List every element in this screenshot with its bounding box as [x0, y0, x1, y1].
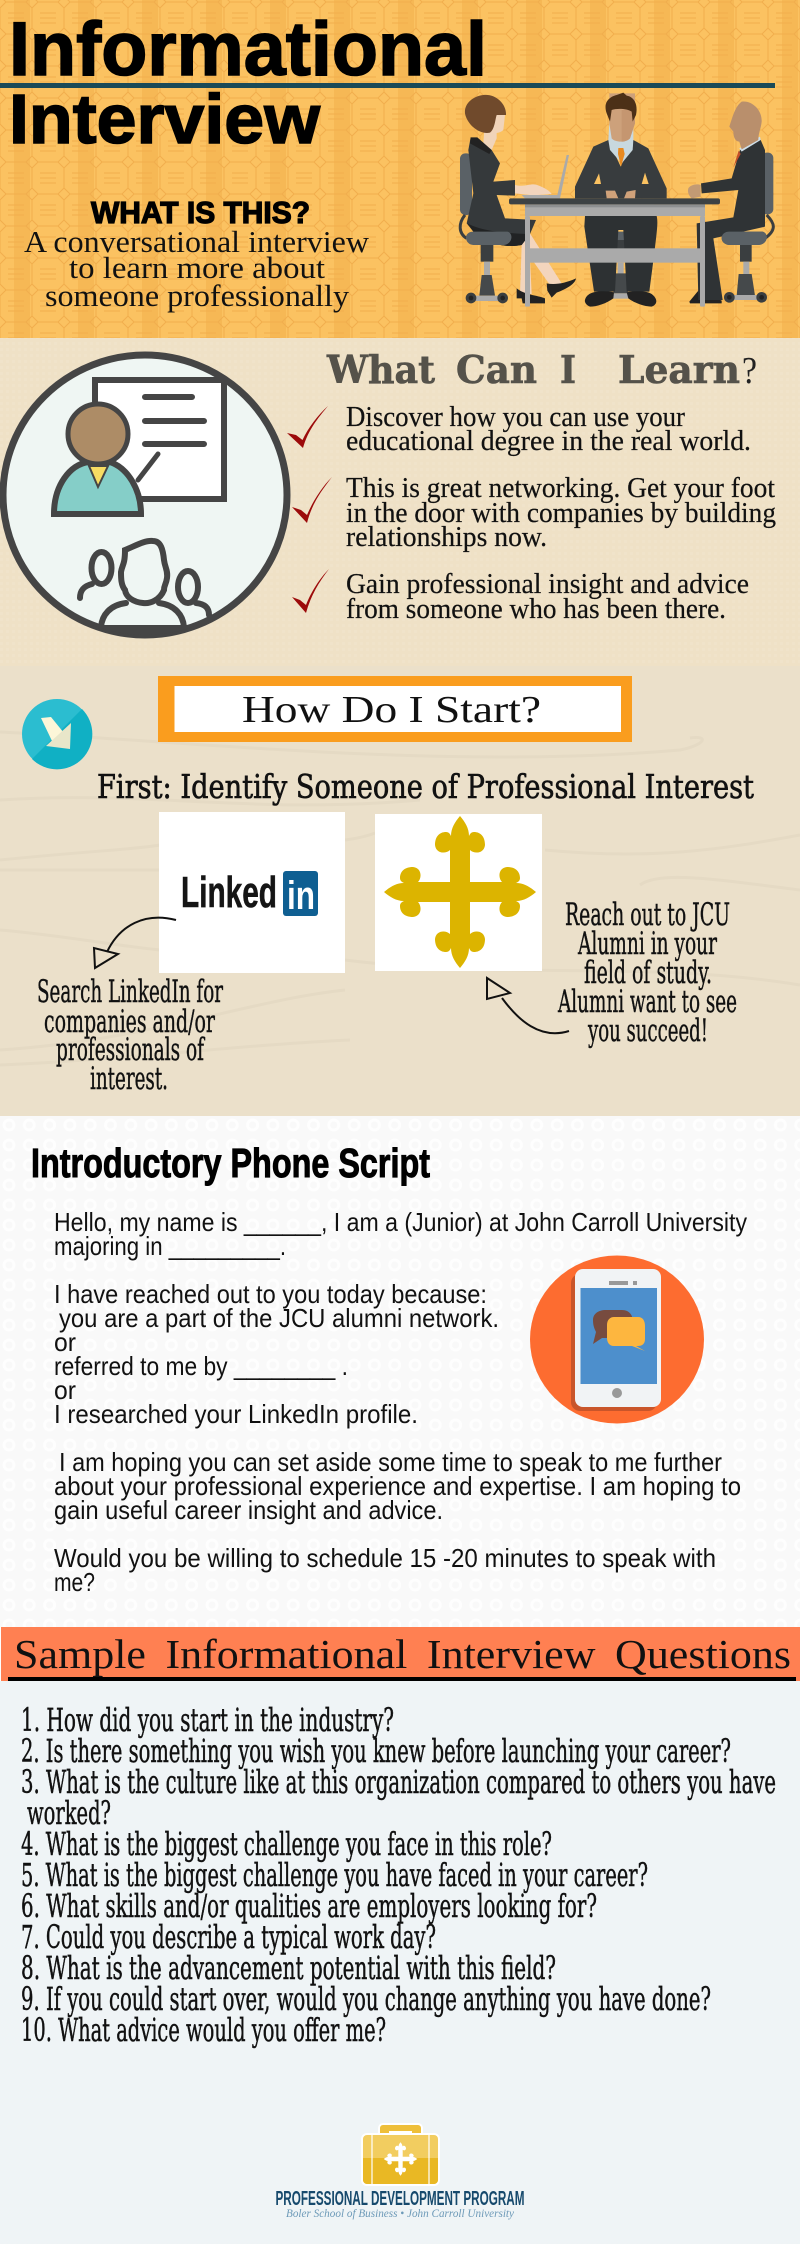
text: script greeting: [54, 1207, 747, 1261]
arrow: to LinkedIn note: [94, 918, 176, 968]
heading: what can I learn: ?: [742, 350, 757, 392]
text: learn item 3: from someone who has been there.: [346, 594, 726, 625]
icon: centre chair: [605, 232, 637, 299]
panel: header: [0, 0, 800, 338]
heading box: how do I start: [158, 676, 632, 742]
icon: right man: [688, 101, 767, 303]
text: script reason: I researched your LinkedIn profile.: [54, 1399, 418, 1429]
list: questions: 10. What advice would you offer me?: [21, 2011, 386, 2049]
list: questions: 4. What is the biggest challenge you face in this role?: [21, 1825, 552, 1863]
text: script reason: I have reached out to you today because:: [54, 1279, 487, 1309]
text: alumni note: [557, 897, 737, 1049]
heading box: how do I start: How Do I Start?: [242, 689, 541, 731]
text: definition: [24, 224, 370, 313]
text: definition: A conversational interview: [24, 224, 370, 259]
title: Interview: Interview: [9, 80, 321, 158]
text: learn item 1: [346, 402, 751, 457]
text: script reason: or: [54, 1375, 76, 1405]
text: LinkedIn note: companies and/or: [44, 1004, 215, 1040]
logo: LinkedIn: in: [287, 874, 315, 918]
icon: presenter: [54, 404, 141, 514]
icon: check mark 1: [287, 406, 328, 448]
heading band: sample questions: Sample Informational Interview Questions: [14, 1631, 791, 1677]
logo: professional development program: [276, 2124, 524, 2220]
panel: what can I learn: [0, 338, 800, 666]
text: learn item 1: Discover how you can use your: [346, 402, 686, 433]
heading: what can I learn: I: [560, 347, 576, 392]
text: LinkedIn note: professionals of: [56, 1032, 205, 1068]
list: questions: worked?: [27, 1794, 111, 1832]
list: questions: 8. What is the advancement potential with this field?: [21, 1949, 556, 1987]
icon: woman: [465, 95, 576, 303]
panel: how do I start: [0, 666, 800, 1116]
text: learn item 2: This is great networking. Get your foot: [346, 473, 775, 504]
text: script closing: [54, 1543, 716, 1597]
list: questions: 1. How did you start in the industry?: [21, 1701, 394, 1739]
icon: audience: [80, 541, 209, 627]
panel: introductory phone script: [0, 1116, 800, 1627]
icon: smartphone with chat bubbles: [530, 1256, 704, 1424]
text: learn item 2: [346, 473, 776, 553]
list: questions: 7. Could you describe a typical work day?: [21, 1918, 436, 1956]
text: script closing: Would you be willing to schedule 15 -20 minutes to speak with: [54, 1543, 716, 1573]
text: definition: to learn more about: [69, 250, 325, 285]
heading: phone script: Introductory Phone Script: [31, 1140, 430, 1186]
icon: right chair: [722, 153, 773, 303]
text: script reason: you are a part of the JCU alumni network.: [59, 1303, 499, 1333]
text: script reason: referred to me by ________ .: [54, 1351, 348, 1381]
text: LinkedIn note: Search LinkedIn for: [37, 974, 223, 1010]
icon: check mark 3: [292, 569, 329, 613]
text: program name: PROFESSIONAL DEVELOPMENT PROGRAM: [276, 2188, 524, 2210]
illustration: presenter and audience in circle: [3, 355, 287, 640]
panel: sample interview questions: [0, 1627, 800, 2244]
text: learn item 3: Gain professional insight and advice: [346, 569, 749, 600]
icon: teal arrow circle: [22, 699, 92, 769]
icon: centre man: [575, 93, 667, 307]
text: definition: someone professionally: [45, 278, 350, 313]
heading: what can I learn: What: [326, 347, 435, 392]
icon: left chair: [460, 153, 508, 303]
text: script reason: or: [54, 1327, 76, 1357]
text: LinkedIn note: interest.: [90, 1061, 168, 1097]
text: LinkedIn note: [37, 974, 223, 1097]
logo: LinkedIn: Linked: [181, 868, 277, 917]
title: Informational: Informational: [9, 7, 487, 92]
heading: what is this: WHAT IS THIS?: [91, 195, 310, 230]
text: learn item 2: relationships now.: [346, 522, 547, 553]
title divider: [0, 83, 775, 88]
text: alumni note: field of study.: [584, 955, 712, 991]
heading: what can I learn: Learn: [618, 347, 740, 392]
illustration: three people in interview at table: [460, 93, 773, 307]
heading: what can I learn: Can: [456, 347, 537, 392]
heading: what can I learn: [326, 347, 757, 392]
logo: LinkedIn: [159, 812, 345, 973]
text: script greeting: majoring in _________.: [54, 1231, 286, 1261]
list: questions: [21, 1701, 776, 2049]
arrow: to alumni note: [487, 978, 569, 1033]
text: learn item 3: [346, 569, 749, 625]
text: script request: about your professional experience and expertise. I am hoping to: [54, 1471, 741, 1501]
text: script request: [54, 1447, 741, 1525]
icon: gold cross: [375, 814, 542, 971]
icon: table: [509, 198, 720, 307]
text: school name: Boler School of Business • John Carroll University: [286, 2206, 515, 2220]
text: script reason: [54, 1279, 499, 1429]
icon: briefcase with cross: [362, 2124, 439, 2185]
text: script request: gain useful career insight and advice.: [54, 1495, 443, 1525]
icon: laptop: [522, 155, 569, 198]
icon: presentation board: [95, 380, 224, 499]
text: script closing: me?: [54, 1567, 95, 1597]
icon: check mark 2: [292, 477, 332, 523]
heading: first step: First: Identify Someone of Professional Interest: [97, 767, 754, 806]
text: script request: I am hoping you can set aside some time to speak to me further: [59, 1447, 722, 1477]
text: learn item 1: educational degree in the real world.: [346, 426, 751, 457]
text: learn item 2: in the door with companies by building: [346, 498, 776, 529]
text: alumni note: you succeed!: [587, 1013, 708, 1049]
text: alumni note: Alumni in your: [577, 926, 717, 962]
